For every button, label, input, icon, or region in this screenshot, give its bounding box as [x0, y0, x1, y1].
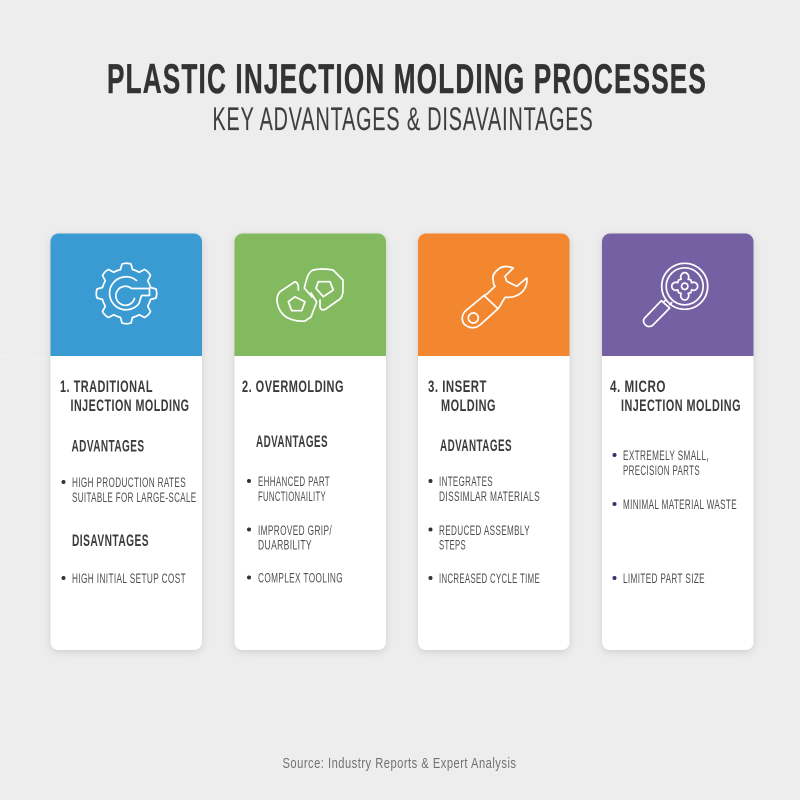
bullet: dissimilar materials: DISSIMLAR MATERIALS: [439, 489, 540, 504]
panel: insert molding: [418, 234, 570, 650]
bullet: precision parts: PRECISION PARTS: [623, 463, 700, 478]
bullet: grip: DUARBILITY: [258, 538, 312, 552]
bullet: assembly: [428, 523, 530, 552]
heading: overmolding: 2. OVERMOLDING: [242, 377, 344, 396]
bullet: assembly: STEPS: [439, 538, 466, 552]
heading: traditional injection molding: [60, 377, 190, 415]
bullet: functionality: FUNCTIONAILITY: [258, 489, 326, 504]
bullet: dissimilar materials: [428, 474, 540, 504]
icon: wrench: [462, 266, 527, 328]
icon: magnifier: [643, 263, 708, 327]
icon: overmolded parts: [277, 269, 343, 321]
bullet: setup cost: HIGH INITIAL SETUP COST: [72, 571, 186, 586]
bullet: dissimilar materials: INTEGRATES: [439, 474, 493, 489]
source note: Source: Industry Reports & Expert Analysis: [282, 755, 516, 772]
bullet: part size: LIMITED PART SIZE: [623, 571, 705, 586]
advantages label: ADVANTAGES: [440, 437, 512, 455]
bullet: functionality: EHHANCED PART: [258, 474, 330, 489]
disadvantages label: DISAVNTAGES: [72, 532, 149, 550]
bullet: precision parts: [612, 448, 709, 478]
bullet: production rates: [62, 475, 196, 505]
header: purple: [602, 234, 754, 356]
advantages label: ADVANTAGES: [72, 438, 144, 456]
bullet: cycle time: [428, 571, 540, 586]
header: blue: [50, 234, 202, 356]
bullet: tooling: [247, 570, 343, 586]
header: green: [234, 234, 386, 356]
bullet: part size: [612, 571, 705, 586]
bullet: tooling: COMPLEX TOOLING: [258, 570, 343, 586]
panel: overmolding: [234, 234, 386, 650]
bullet: cycle time: INCREASED CYCLE TIME: [439, 571, 540, 586]
bullet: grip: IMPROVED GRIP/: [258, 523, 332, 538]
heading: insert molding: MOLDING: [441, 396, 496, 415]
bullet: precision parts: EXTREMELY SMALL,: [623, 448, 709, 463]
panel: micro injection molding: [602, 234, 754, 650]
bullet: grip: [247, 523, 332, 552]
bullet: production rates: HIGH PRODUCTION RATES: [72, 475, 186, 490]
heading: micro injection molding: 4. MICRO: [610, 377, 666, 396]
heading: insert molding: [428, 377, 496, 415]
bullet: setup cost: [62, 571, 186, 586]
header: orange: [418, 234, 570, 356]
bullet: production rates: SUITABLE FOR LARGE-SCALE: [72, 490, 196, 505]
panel: traditional injection molding: [50, 234, 202, 650]
icon: gear: [96, 263, 157, 324]
advantages label: ADVANTAGES: [256, 433, 328, 451]
heading: micro injection molding: [610, 377, 741, 415]
bullet: assembly: REDUCED ASSEMBLY: [439, 523, 530, 538]
heading: traditional injection molding: INJECTION MOLDING: [70, 396, 190, 415]
bullet: material waste: [612, 497, 737, 512]
heading: insert molding: 3. INSERT: [428, 377, 487, 396]
heading: traditional injection molding: 1. TRADITIONAL: [60, 377, 153, 396]
bullet: functionality: [247, 474, 330, 504]
